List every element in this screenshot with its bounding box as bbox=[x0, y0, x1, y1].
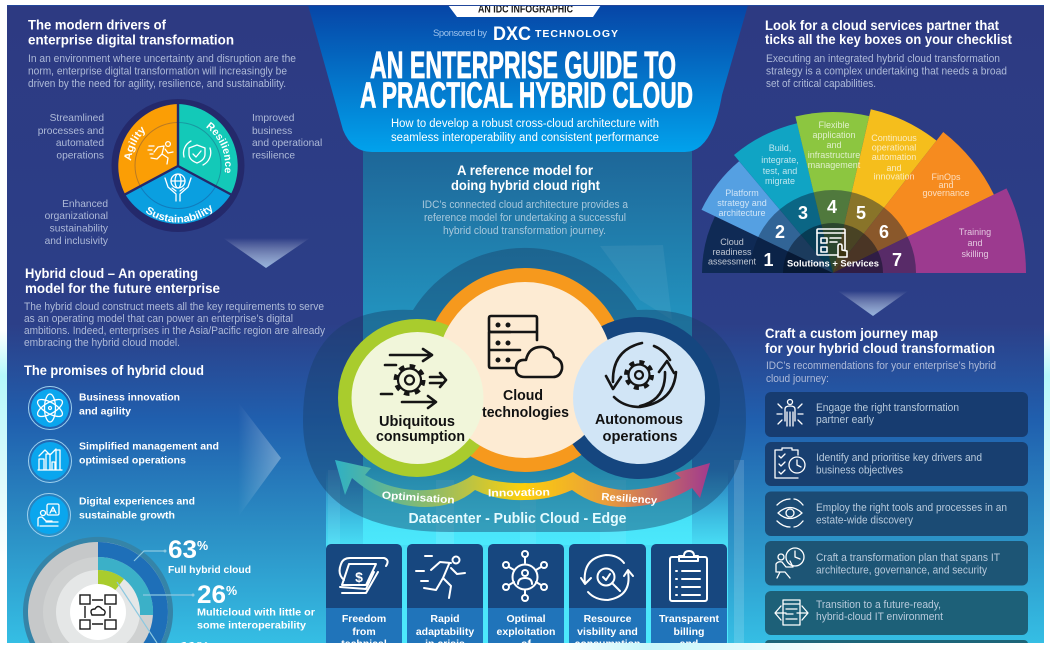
card: optimal: exploitation bbox=[497, 626, 555, 638]
step 3 bbox=[765, 492, 1028, 536]
segment labels: migrate bbox=[765, 176, 795, 186]
sponsor line: Sponsored by bbox=[433, 28, 487, 39]
section: modern drivers heading bbox=[28, 16, 234, 48]
header banner bbox=[308, 4, 748, 152]
card: freedom: Freedom bbox=[342, 613, 386, 625]
hybrid cloud paragraph: as an operating model that can power an enterprise’s digital bbox=[24, 313, 293, 325]
stat: 11%: 11% bbox=[180, 641, 210, 650]
title: AN ENTERPRISE GUIDE TO bbox=[370, 45, 676, 87]
background glow edges bbox=[0, 330, 1050, 650]
arrow band: optimisation, innovation, resiliency: Resiliency bbox=[601, 491, 658, 507]
promise 2 bbox=[28, 440, 219, 482]
subtitle: How to develop a robust cross-cloud architecture with bbox=[391, 118, 659, 130]
segment labels: governance bbox=[922, 188, 970, 198]
stat: 63%: 63 bbox=[168, 536, 197, 564]
fan chart: capabilities bbox=[702, 109, 1026, 273]
segment numbers: 4 bbox=[827, 197, 837, 217]
section: hybrid cloud heading bbox=[26, 268, 220, 296]
segment labels: infrastructure bbox=[808, 150, 860, 160]
stat: 26% bbox=[197, 581, 315, 632]
card: transparent bbox=[651, 544, 727, 650]
promise 3: Digital experiences and bbox=[79, 496, 195, 508]
driver labels: processes and bbox=[38, 126, 104, 137]
card: transparent: and bbox=[680, 638, 698, 650]
card: freedom bbox=[326, 544, 402, 650]
icon: shield bbox=[184, 141, 211, 165]
driver label: resilience bbox=[252, 113, 322, 162]
card: optimal bbox=[488, 544, 564, 650]
segment labels: Build, bbox=[769, 143, 791, 153]
drivers paragraph: In an environment where uncertainty and disruption are the bbox=[28, 53, 296, 65]
sponsor line: DXC bbox=[493, 24, 531, 45]
segment numbers: 2 bbox=[775, 222, 785, 242]
card: transparent: Transparent bbox=[659, 613, 720, 625]
promise 3 bbox=[28, 494, 195, 536]
datacenter label: Datacenter - Public Cloud - Edge bbox=[408, 511, 626, 527]
drivers paragraph bbox=[28, 53, 296, 90]
driver label: resilience: Improved bbox=[252, 113, 295, 124]
segment labels: Training bbox=[959, 227, 991, 237]
section: modern drivers heading: enterprise digital transformation bbox=[28, 32, 234, 48]
step 3: Employ the right tools and processes in an bbox=[816, 502, 1007, 514]
card: freedom: $ bbox=[355, 569, 363, 585]
stat: 63% bbox=[168, 540, 250, 575]
reference model paragraph: reference model for undertaking a successful bbox=[424, 212, 626, 224]
partner paragraph: strategy is a complex undertaking that needs a broad bbox=[766, 66, 1007, 78]
reference model paragraph: hybrid cloud transformation journey. bbox=[443, 225, 606, 237]
segment numbers: 3 bbox=[798, 203, 808, 223]
stat: 26%: some interoperability bbox=[197, 620, 306, 632]
card: resource: Resource bbox=[584, 613, 632, 625]
segment labels: management bbox=[808, 160, 861, 170]
step 1 bbox=[765, 392, 1028, 437]
segment numbers: 7 bbox=[892, 250, 902, 270]
partner paragraph: Executing an integrated hybrid cloud transformation bbox=[766, 53, 1000, 65]
segment labels: Continuous bbox=[871, 133, 917, 143]
circle: ubiquitous consumption: Ubiquitous bbox=[379, 414, 455, 430]
segment numbers: 1 bbox=[763, 250, 774, 270]
icon: gear with arrows bbox=[381, 349, 446, 408]
title: A PRACTICAL HYBRID CLOUD bbox=[360, 74, 693, 116]
segment labels: integrate, bbox=[761, 155, 799, 165]
segment numbers bbox=[763, 197, 902, 270]
step 1: Engage the right transformation bbox=[816, 402, 959, 414]
subtitle bbox=[391, 118, 659, 144]
donut: agility, resilience, sustainability: Agility bbox=[124, 126, 145, 161]
sponsor line: TECHNOLOGY bbox=[535, 28, 618, 40]
icon: atom bbox=[35, 394, 65, 422]
segment labels: FinOps bbox=[931, 172, 961, 182]
segment labels: strategy and bbox=[717, 198, 767, 208]
driver labels: organizational bbox=[45, 211, 108, 222]
drivers paragraph: norm, enterprise digital transformation will increasingly be bbox=[28, 66, 287, 78]
driver labels: automated bbox=[56, 138, 104, 149]
icon: network person bbox=[503, 551, 547, 601]
section: cloud partner heading bbox=[765, 17, 1012, 47]
step 5: Transition to a future-ready, bbox=[816, 599, 941, 611]
step 2: business objectives bbox=[816, 464, 904, 476]
icon: gear with cycle arrows bbox=[606, 343, 676, 407]
circle: cloud technologies: Cloud bbox=[503, 388, 543, 404]
drivers paragraph: driven by the need for agility, resilience, and sustainability. bbox=[28, 78, 286, 90]
circle: ubiquitous consumption: consumption bbox=[376, 429, 465, 445]
card: optimal: of bbox=[521, 638, 531, 650]
icon: running person bbox=[416, 556, 465, 598]
reference model heading bbox=[452, 165, 600, 193]
donut: agility, resilience, sustainability: Sustainability bbox=[146, 204, 212, 223]
icon: bar chart bbox=[38, 449, 62, 470]
icon: runner bbox=[148, 142, 173, 164]
card: rapid bbox=[407, 544, 483, 650]
segment labels: Cloud bbox=[720, 237, 744, 247]
card: resource bbox=[569, 544, 646, 650]
stat: 63%: Full hybrid cloud bbox=[168, 564, 251, 576]
section: hybrid cloud heading: Hybrid cloud – An operating bbox=[25, 265, 198, 281]
hybrid cloud paragraph: The hybrid cloud construct meets all the key requirements to serve bbox=[24, 301, 324, 313]
icon: linked monitors and cloud bbox=[80, 595, 116, 629]
stat: 26%: Multicloud with little or bbox=[197, 606, 315, 618]
donut chart: cloud adoption bbox=[23, 537, 194, 645]
journey paragraph: cloud journey: bbox=[766, 373, 829, 385]
step 3: estate-wide discovery bbox=[816, 514, 914, 526]
segment labels: application bbox=[812, 130, 856, 140]
badge: An IDC infographic bbox=[448, 6, 600, 17]
driver labels: and inclusivity bbox=[45, 236, 109, 247]
card: rapid: Rapid bbox=[430, 613, 460, 625]
solutions label: Solutions + Services bbox=[787, 258, 879, 270]
sponsor line bbox=[434, 26, 618, 40]
card: resource: consumption bbox=[575, 638, 640, 650]
icon: hands with globe bbox=[165, 174, 191, 201]
promise 1 bbox=[28, 386, 180, 430]
segment labels: automation bbox=[872, 152, 916, 162]
segment labels: innovation bbox=[873, 172, 915, 182]
section: cloud partner heading: ticks all the key boxes on your checklist bbox=[765, 31, 1012, 47]
journey paragraph: IDC’s recommendations for your enterprise’s hybrid bbox=[766, 360, 996, 372]
section: journey map heading bbox=[765, 325, 995, 356]
step 2 bbox=[765, 442, 1028, 486]
icon: server and cloud bbox=[489, 316, 562, 377]
segment labels: and bbox=[938, 180, 954, 190]
segment labels: architecture bbox=[718, 208, 766, 218]
segment labels: and bbox=[826, 140, 842, 150]
circle: ubiquitous consumption bbox=[352, 332, 484, 464]
step 4: Craft a transformation plan that spans IT bbox=[816, 552, 1000, 564]
card: freedom: technical bbox=[341, 638, 387, 650]
segment labels: and bbox=[967, 238, 983, 248]
promises heading: The promises of hybrid cloud bbox=[24, 362, 204, 378]
icon: clipboard bbox=[670, 551, 707, 601]
circle: autonomous operations bbox=[573, 332, 705, 464]
icon: person with arrows bbox=[777, 400, 803, 426]
reference model heading: doing hybrid cloud right bbox=[451, 177, 600, 193]
arrow band: optimisation, innovation, resiliency: Innovation bbox=[488, 486, 550, 500]
panel frame line bbox=[7, 5, 1044, 6]
segment labels: Platform bbox=[725, 188, 759, 198]
step 4: architecture, governance, and security bbox=[816, 564, 988, 576]
arrow band: optimisation, innovation, resiliency bbox=[335, 460, 710, 507]
segment labels: readiness bbox=[712, 247, 752, 257]
circle: cloud technologies bbox=[437, 282, 613, 458]
hybrid cloud paragraph: embracing the hybrid cloud model. bbox=[24, 337, 180, 349]
card: transparent: billing bbox=[674, 626, 704, 638]
step 5: hybrid-cloud IT environment bbox=[816, 611, 943, 623]
stat: 63%: % bbox=[197, 539, 208, 553]
arrow band: optimisation, innovation, resiliency: Optimisation bbox=[381, 489, 455, 507]
donut: agility, resilience, sustainability bbox=[112, 99, 244, 232]
driver labels bbox=[38, 113, 109, 247]
section: journey map heading: for your hybrid cloud transformation bbox=[765, 340, 995, 356]
badge: An IDC infographic: AN IDC INFOGRAPHIC bbox=[478, 4, 573, 16]
driver labels: Streamlined bbox=[50, 113, 104, 124]
segment numbers: 6 bbox=[879, 222, 889, 242]
segment labels: and bbox=[886, 163, 902, 173]
stat: 26%: % bbox=[226, 584, 237, 598]
driver label: resilience: business bbox=[252, 126, 292, 137]
step 4 bbox=[765, 541, 1028, 586]
section: journey map heading: Craft a custom journey map bbox=[765, 325, 938, 341]
reference model heading: A reference model for bbox=[457, 162, 594, 178]
stat: 26%: 26 bbox=[197, 581, 226, 609]
driver labels: sustainability bbox=[50, 224, 109, 234]
driver label: resilience: and operational bbox=[252, 138, 322, 149]
card: optimal: Optimal bbox=[506, 613, 546, 625]
card: rapid: adaptability bbox=[416, 626, 474, 638]
card: rapid: in crisis bbox=[425, 638, 465, 650]
driver label: resilience: resilience bbox=[252, 150, 295, 162]
section: modern drivers heading: The modern drivers of bbox=[28, 16, 166, 32]
donut: agility, resilience, sustainability: Resilience bbox=[206, 122, 231, 173]
reference model paragraph: IDC’s connected cloud architecture provides a bbox=[422, 199, 628, 211]
cloud shape backdrop bbox=[303, 248, 746, 532]
driver labels: Enhanced bbox=[62, 199, 108, 210]
step 6 bbox=[765, 640, 1028, 649]
card: resource: visbility and bbox=[577, 626, 638, 638]
circle: autonomous operations: Autonomous bbox=[595, 412, 683, 428]
icon: cash bbox=[340, 558, 388, 593]
hybrid cloud paragraph: ambitions. Indeed, enterprises in the Asia/Pacific region are already bbox=[24, 325, 326, 337]
partner paragraph bbox=[766, 53, 1007, 90]
segment labels: assessment bbox=[708, 256, 757, 266]
icon: solutions checklist bbox=[817, 229, 847, 257]
card: freedom: from bbox=[352, 626, 376, 638]
segment labels: operational bbox=[872, 142, 916, 152]
icon: magnifier with cycle bbox=[581, 555, 633, 600]
icon: person and clock bbox=[776, 548, 804, 578]
circle: cloud technologies: technologies bbox=[482, 405, 569, 421]
promise 2: optimised operations bbox=[79, 454, 186, 466]
arrow down right bbox=[838, 291, 908, 316]
partner paragraph: set of critical capabilities. bbox=[766, 78, 876, 90]
journey paragraph bbox=[766, 360, 996, 385]
circle rings bbox=[338, 268, 720, 479]
reference model paragraph bbox=[422, 199, 628, 237]
driver labels: operations bbox=[56, 150, 104, 162]
step 5 bbox=[765, 591, 1028, 635]
icon: code window bbox=[775, 600, 808, 625]
segment labels bbox=[708, 120, 991, 266]
step 2: Identify and prioritise key drivers and bbox=[816, 452, 982, 464]
title bbox=[360, 51, 692, 108]
promise 1: Business innovation bbox=[79, 392, 180, 404]
chevron arrow right bbox=[243, 410, 281, 509]
section: cloud partner heading: Look for a cloud services partner that bbox=[765, 17, 999, 33]
icon: eye bbox=[777, 499, 803, 527]
step 1: partner early bbox=[816, 414, 875, 426]
center column bbox=[326, 150, 744, 645]
segment labels: skilling bbox=[961, 249, 989, 259]
arrow down left bbox=[226, 240, 307, 268]
segment numbers: 5 bbox=[856, 203, 866, 223]
circle: autonomous operations: operations bbox=[602, 429, 678, 445]
promise 3: sustainable growth bbox=[79, 510, 175, 522]
segment labels: test, and bbox=[763, 166, 797, 176]
segment labels: Flexible bbox=[818, 120, 850, 130]
hybrid cloud paragraph bbox=[24, 301, 326, 349]
promise 1: and agility bbox=[79, 406, 131, 418]
icon: person with laptop bbox=[38, 504, 59, 526]
icon: clipboard with clock bbox=[775, 448, 805, 478]
promise 2: Simplified management and bbox=[79, 440, 219, 452]
subtitle: seamless interoperability and consistent performance bbox=[391, 132, 659, 144]
section: hybrid cloud heading: model for the future enterprise bbox=[25, 280, 220, 296]
